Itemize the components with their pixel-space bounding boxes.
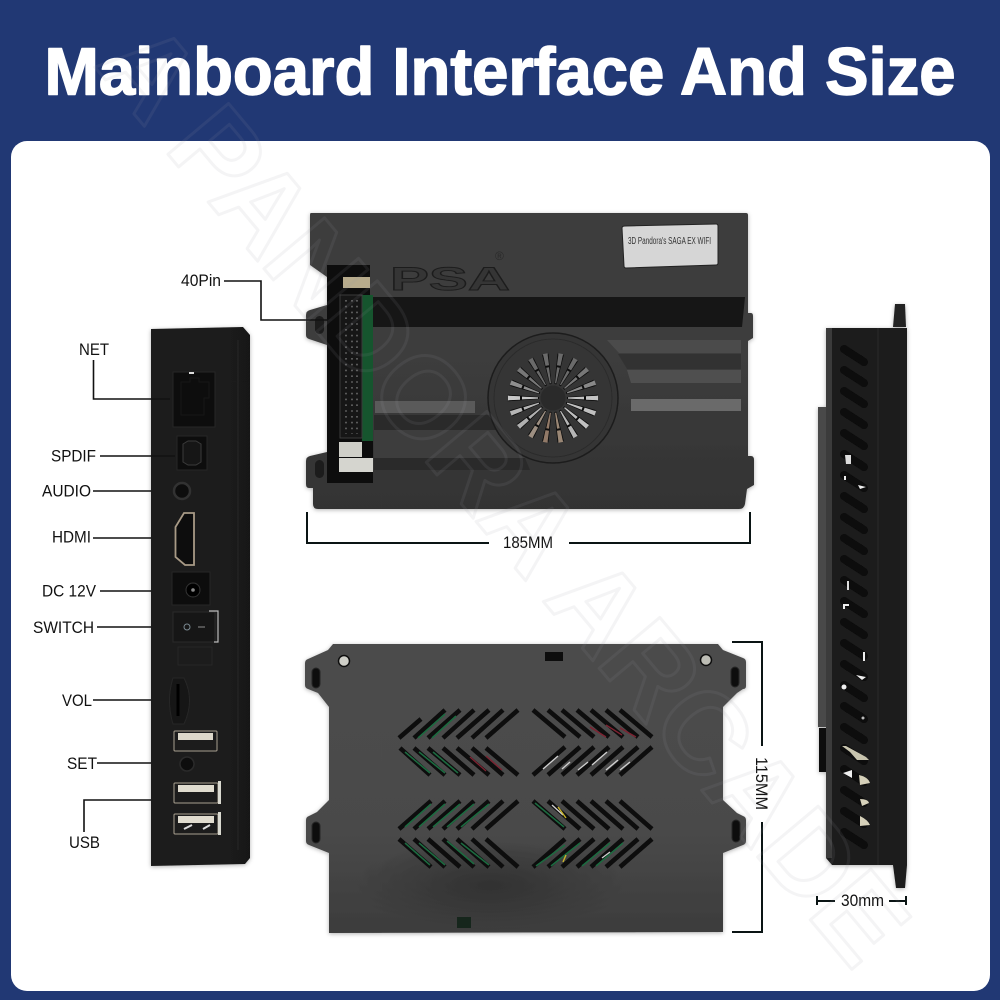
icon: rocker switch: [173, 611, 218, 642]
PSA logo: PSA: [390, 261, 510, 297]
icon: USB port 2: [174, 781, 221, 804]
icon: switch marking: [178, 647, 212, 665]
dimension: 30mm depth: [817, 892, 906, 910]
device: bottom view with vents: [305, 644, 746, 933]
icon: volume wheel: [170, 678, 190, 724]
small bottom clip: [457, 917, 471, 928]
vent slots: [399, 710, 652, 867]
icon: audio jack: [174, 483, 190, 499]
dark shading patch: [355, 840, 625, 930]
ribbed stripes: [374, 340, 741, 470]
dark band: [372, 297, 745, 327]
dimension: 185MM width: [307, 512, 750, 552]
callout: USB: [69, 800, 151, 852]
icon: DC 12V jack: [172, 572, 210, 605]
mounting slots: [312, 667, 740, 843]
icon: RJ45 network port: [173, 372, 215, 427]
callout: SET: SET: [67, 755, 97, 773]
case body: [306, 213, 754, 509]
dimension: 115MM height: 115MM: [752, 757, 770, 810]
device: side view with slanted slots: [818, 304, 907, 888]
dark side tab: [819, 728, 826, 772]
device: front panel with ports: [151, 327, 250, 866]
device: top view of mainboard case: [306, 213, 754, 509]
callout: 40Pin: 40Pin: [181, 272, 221, 290]
icon: USB port 1: [174, 731, 217, 751]
callout: DC 12V: DC 12V: [42, 582, 96, 600]
callout: NET: NET: [79, 341, 109, 359]
callout: USB: USB: [69, 834, 100, 852]
PSA logo: ®: [495, 249, 504, 263]
callout: AUDIO: [42, 482, 151, 500]
title: Mainboard Interface And Size: [44, 34, 956, 110]
sticker label: [622, 224, 718, 268]
watermark: A PANDORA ARCADE: [74, 0, 934, 989]
callout: DC 12V: [42, 582, 151, 600]
dimension: 115MM height: [732, 642, 770, 932]
side body: [826, 328, 907, 865]
ear holes: [315, 316, 324, 334]
grey side rail: [818, 407, 832, 727]
icon: SPDIF port: [177, 436, 207, 470]
callout: SET: [67, 755, 151, 773]
PSA logo: [390, 249, 510, 297]
sticker label: 3D Pandora's SAGA EX WIFI: [628, 236, 711, 247]
callout: SPDIF: [51, 448, 175, 466]
slot highlights: [842, 455, 870, 826]
dimension: 185MM width: 185MM: [503, 534, 553, 552]
callout: AUDIO: AUDIO: [42, 482, 91, 500]
callout: 40Pin: [181, 272, 332, 320]
screw right: [700, 654, 712, 666]
callout: SPDIF: SPDIF: [51, 448, 96, 466]
fan grille: [488, 333, 618, 463]
mounting tab bottom: [893, 865, 907, 888]
callout: VOL: VOL: [62, 692, 92, 710]
callout: HDMI: HDMI: [52, 528, 91, 546]
40-pin connector bay: [327, 265, 373, 483]
icon: HDMI port: [176, 513, 194, 565]
mounting tab top: [893, 304, 906, 327]
icon: USB port 3: [174, 812, 221, 835]
callout: SWITCH: [33, 619, 151, 637]
callout: NET: [79, 341, 170, 399]
small top clip: [545, 652, 563, 661]
slots: [844, 349, 864, 845]
callout: SWITCH: SWITCH: [33, 619, 94, 637]
icon: SET button: [180, 757, 194, 771]
screw left: [338, 656, 350, 666]
dimension: 30mm depth: 30mm: [841, 892, 884, 910]
callout: HDMI: [52, 528, 151, 546]
callout: VOL: [62, 692, 151, 710]
